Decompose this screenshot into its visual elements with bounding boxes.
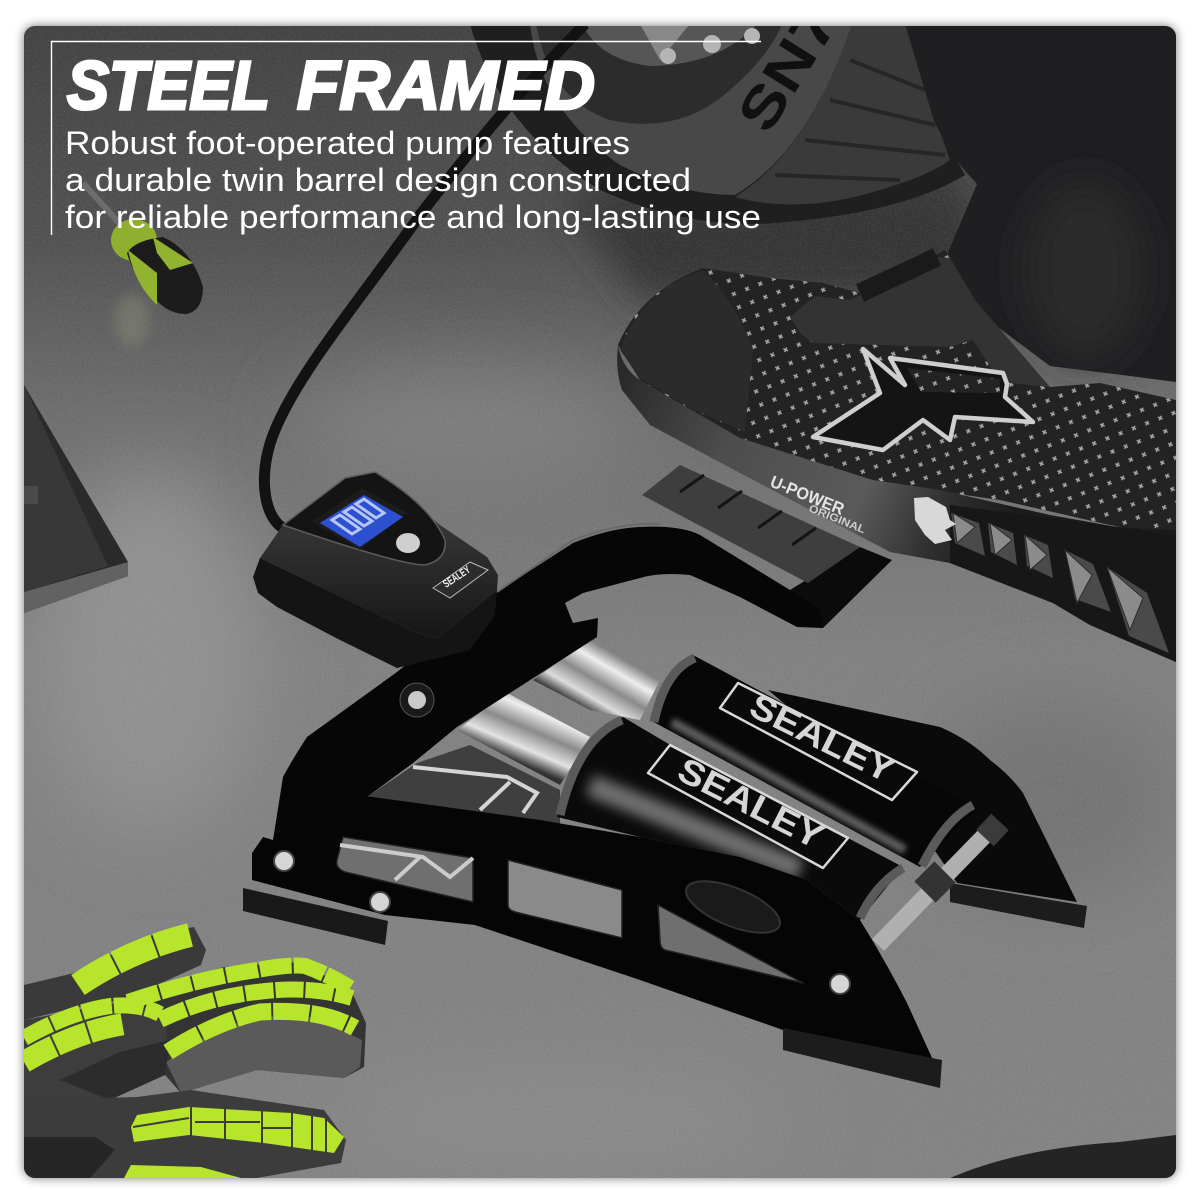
sole band bbox=[617, 345, 1176, 662]
gauge badge: SEALEY bbox=[441, 564, 473, 591]
description: Robust foot-operated pump features bbox=[65, 125, 630, 161]
rear barrel label bbox=[720, 683, 917, 800]
shoe upper bbox=[618, 250, 1176, 540]
logo window bbox=[907, 368, 1000, 393]
safety shoe bbox=[617, 250, 1176, 662]
long fingers bbox=[117, 962, 366, 1093]
sole triangles bbox=[953, 513, 1143, 630]
sole rear section bbox=[950, 505, 1176, 662]
front barrel label bbox=[648, 745, 848, 868]
brand lettering: U-POWER bbox=[768, 472, 847, 519]
rear barrel label: SEALEY bbox=[743, 686, 901, 791]
inner linkage bbox=[367, 745, 560, 825]
neon finger pads bbox=[24, 935, 355, 1062]
blue lcd bbox=[312, 488, 407, 550]
front chrome rod bbox=[457, 693, 590, 785]
left black stand bbox=[24, 385, 128, 613]
trouser leg bbox=[905, 24, 1176, 382]
gauge badge bbox=[433, 562, 488, 598]
frame bolts bbox=[274, 851, 850, 994]
left foot bbox=[243, 888, 388, 945]
laces bbox=[860, 257, 937, 293]
bottom pads bbox=[124, 1165, 241, 1178]
title: STEEL bbox=[67, 47, 270, 124]
air hose bbox=[264, 24, 585, 528]
title bbox=[67, 47, 595, 124]
lower finger pad bbox=[131, 1105, 344, 1153]
gauge top face bbox=[260, 472, 498, 638]
bottom right glove bbox=[950, 1135, 1176, 1178]
rear barrel bbox=[650, 656, 936, 867]
dark glove detail bbox=[24, 1137, 115, 1178]
sole recesses bbox=[951, 513, 1169, 653]
end rods bbox=[878, 822, 1000, 945]
front side plate bbox=[252, 797, 933, 1060]
gauge bezel bbox=[283, 472, 445, 565]
gauge button bbox=[396, 533, 420, 553]
title: FRAMED bbox=[297, 47, 595, 124]
screwdriver bbox=[83, 183, 203, 346]
description: a durable twin barrel design constructed bbox=[65, 162, 691, 198]
front barrel label: SEALEY bbox=[671, 750, 830, 857]
pedal plate bbox=[642, 465, 892, 628]
pivot bolt bbox=[400, 683, 434, 717]
lion emblem bbox=[914, 497, 956, 544]
rim bbox=[536, 24, 782, 124]
front barrel bbox=[557, 717, 903, 920]
sub lettering: ORIGINAL bbox=[807, 503, 867, 536]
thumb and lower finger bbox=[24, 1090, 346, 1178]
rear foot bbox=[950, 883, 1087, 928]
barrel rings bbox=[560, 658, 973, 918]
toe cap bbox=[620, 270, 753, 432]
right foot bbox=[783, 1028, 942, 1088]
valve caps bbox=[660, 28, 760, 64]
tyre tread bbox=[735, 24, 950, 205]
heading frame bbox=[52, 42, 761, 235]
tyre lettering: SN7 bbox=[725, 0, 850, 142]
tyre sidewall bbox=[530, 24, 852, 195]
work gloves bbox=[24, 927, 366, 1178]
pump bbox=[243, 524, 1087, 1088]
description: for reliable performance and long-lasting use bbox=[65, 199, 761, 235]
description bbox=[65, 125, 761, 235]
model plate bbox=[680, 871, 786, 943]
lever arm and pedal arch bbox=[273, 527, 823, 840]
rear plate bbox=[768, 690, 1077, 902]
leather lace panel bbox=[790, 257, 1050, 387]
window linkage bbox=[340, 845, 473, 880]
rear chrome rod bbox=[533, 640, 660, 720]
plate windows bbox=[337, 837, 803, 983]
arch highlight bbox=[497, 524, 660, 592]
palm bbox=[24, 1003, 167, 1103]
digital gauge bbox=[253, 472, 498, 668]
logo star bbox=[813, 349, 1033, 450]
gauge lower body bbox=[253, 558, 497, 668]
tyre and wheel bbox=[470, 26, 965, 224]
glove finger one bbox=[24, 927, 206, 1020]
